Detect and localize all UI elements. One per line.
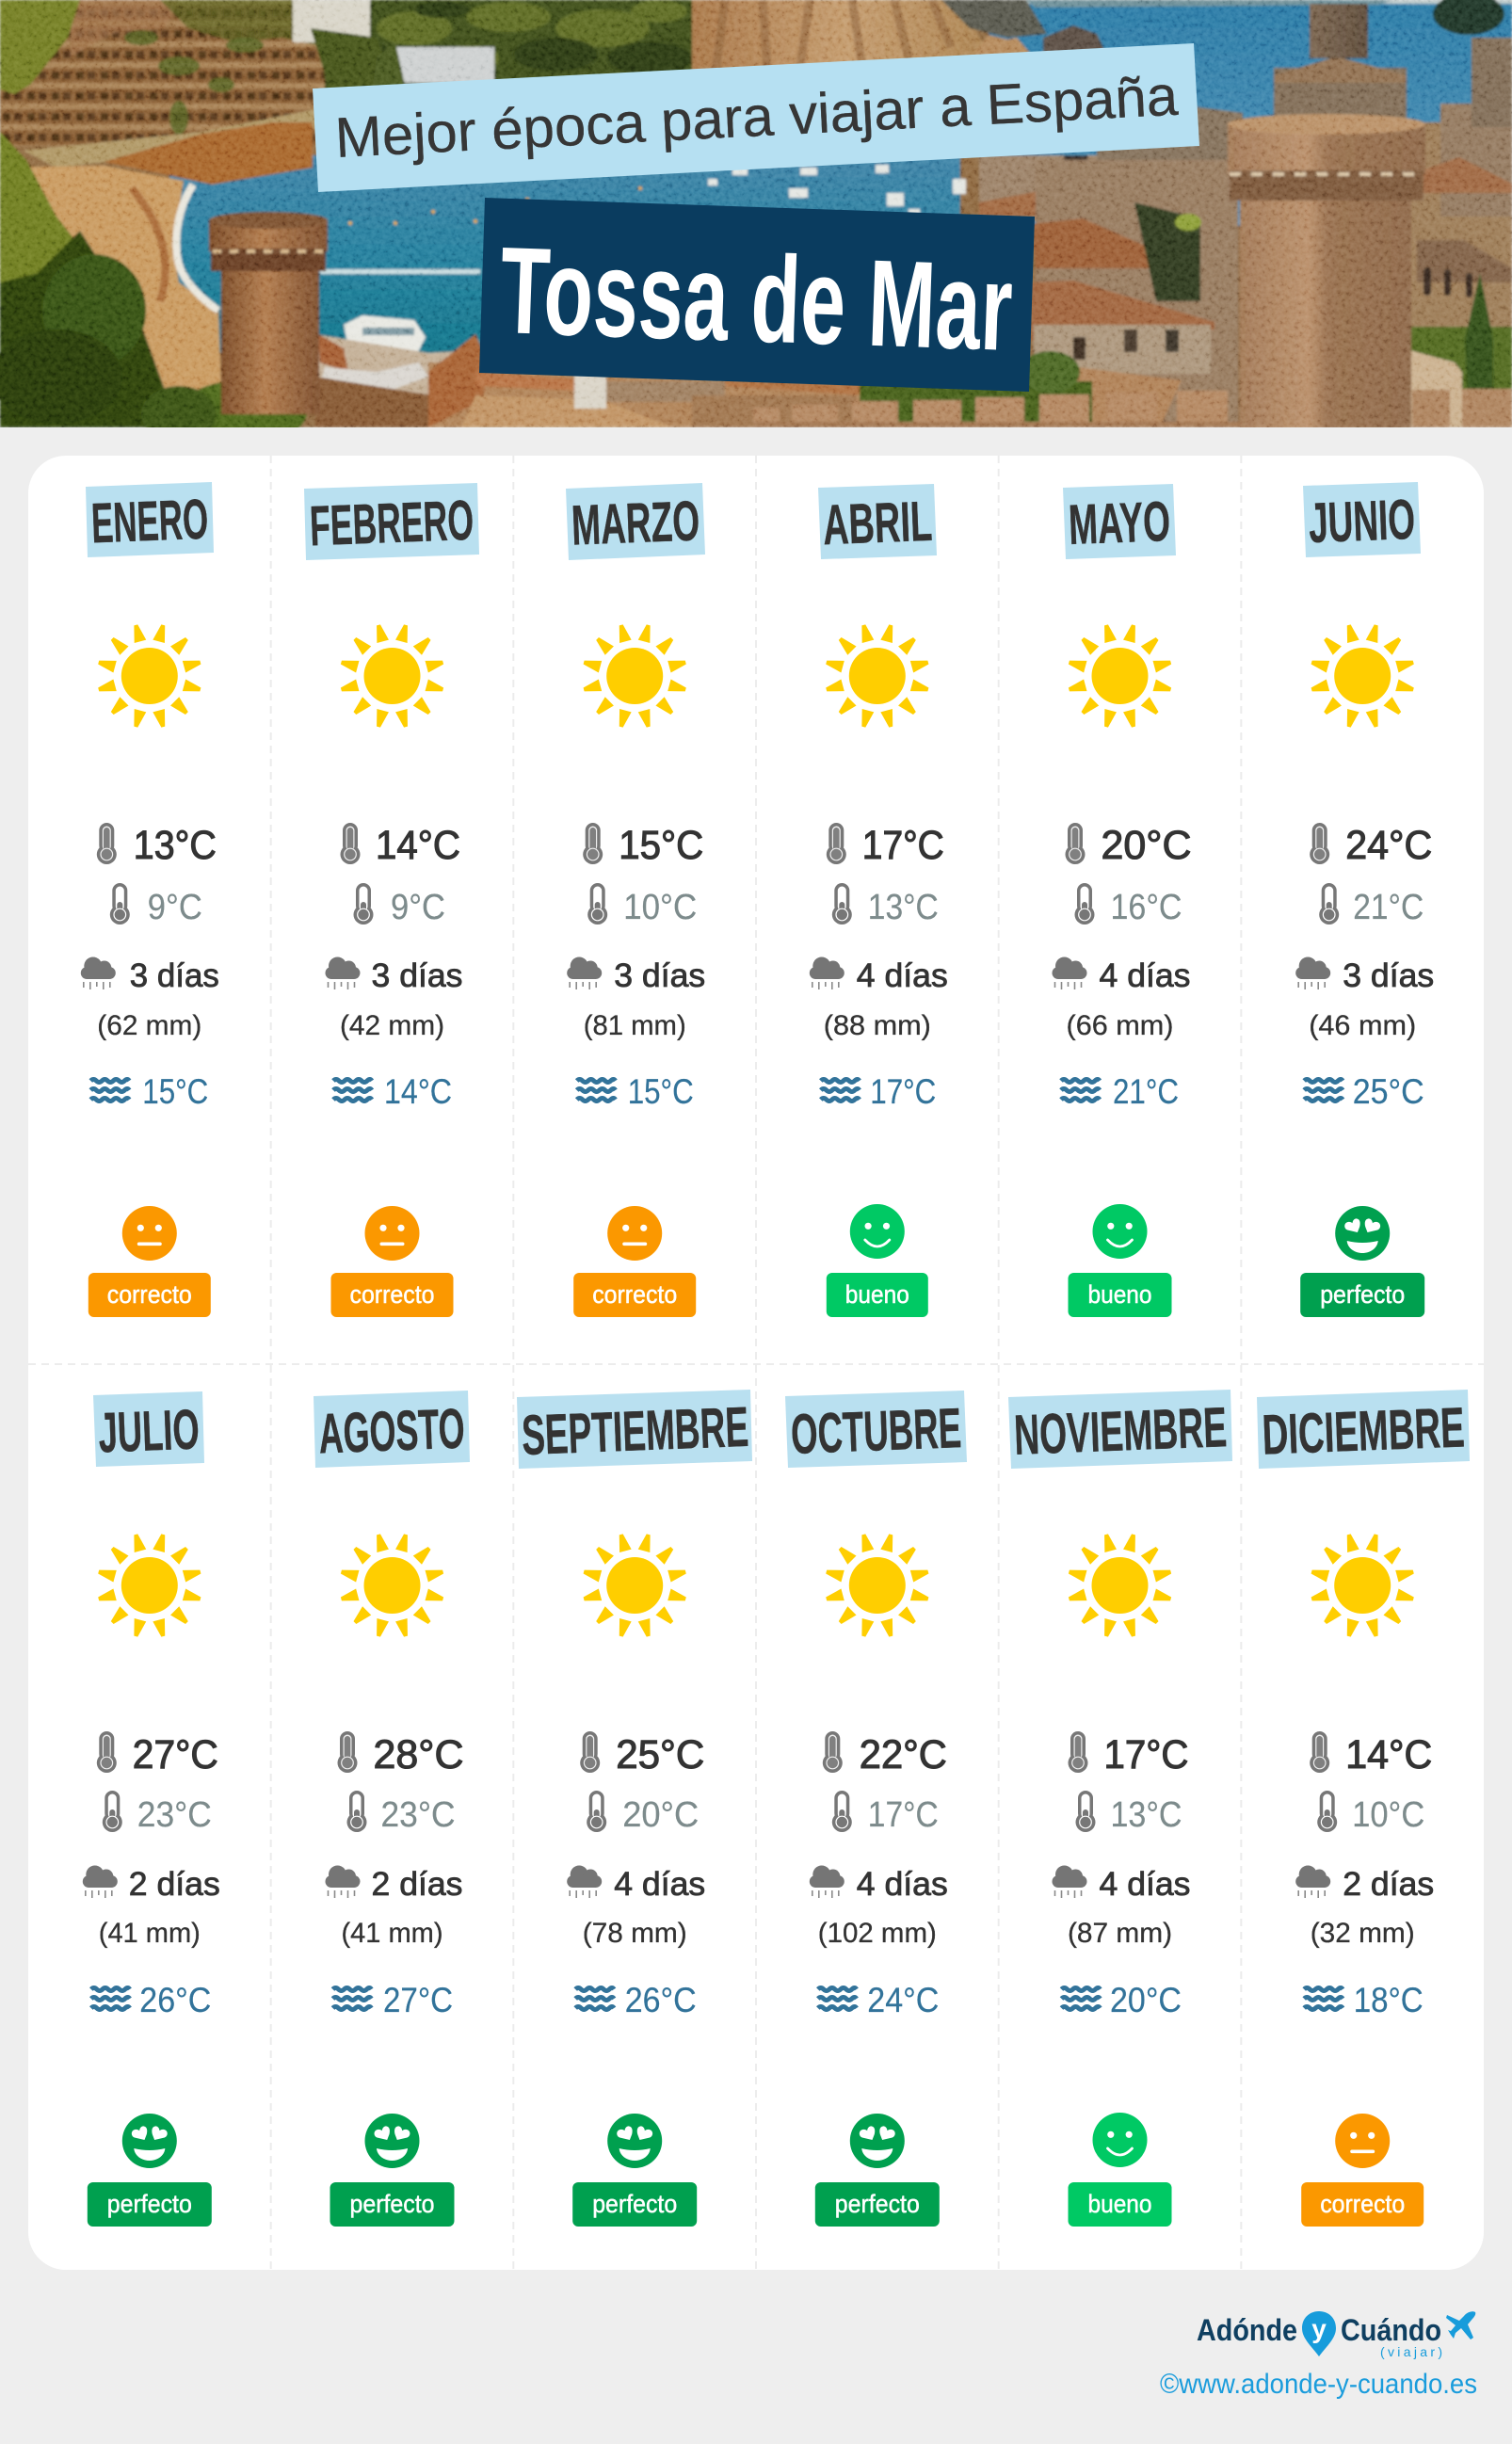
- rainy days: [81, 957, 219, 994]
- rainfall: (32 mm): [1311, 1918, 1415, 1949]
- face: correcto: [607, 1206, 662, 1261]
- month heading: junio: JUNIO: [1308, 488, 1416, 555]
- sea temperature: [333, 1981, 453, 2019]
- max temperature: [1310, 1731, 1432, 1777]
- weather data: junio: [1295, 623, 1434, 1317]
- month heading: septiembre: SEPTIEMBRE: [521, 1395, 749, 1467]
- rainfall: (42 mm): [340, 1010, 444, 1041]
- face: perfecto: [1335, 1206, 1390, 1261]
- month: septiembre: [517, 1390, 752, 2227]
- month heading: enero: [86, 482, 214, 557]
- month heading: octubre: [785, 1391, 967, 1468]
- rating badge: bueno: [1068, 2182, 1171, 2227]
- rainfall: (81 mm): [584, 1010, 686, 1041]
- max temperature: 20°C: [1102, 823, 1192, 868]
- rating badge: bueno: [1068, 1273, 1171, 1317]
- month heading: mayo: [1063, 484, 1176, 559]
- max temperature: [97, 823, 217, 868]
- min temperature: [832, 1791, 939, 1835]
- month: marzo: [566, 483, 705, 1317]
- month heading: agosto: AGOSTO: [317, 1397, 466, 1465]
- min temperature: 13°C: [1111, 1795, 1182, 1835]
- icon: sun: [1068, 1533, 1172, 1638]
- face: perfecto: [365, 2114, 420, 2168]
- sea temperature: [91, 1981, 211, 2019]
- rating badge: correcto: correcto: [1320, 2190, 1405, 2218]
- min temperature: 9°C: [148, 888, 202, 927]
- sea temperature: 25°C: [1353, 1072, 1424, 1111]
- month: julio: [83, 1391, 220, 2227]
- min temperature: 17°C: [868, 1795, 939, 1835]
- rainy days: [83, 1866, 220, 1903]
- rainfall: (88 mm): [824, 1010, 931, 1041]
- rainfall: (87 mm): [1068, 1918, 1172, 1949]
- icon: sun: [582, 623, 687, 729]
- rating badge: perfecto: [1300, 1273, 1424, 1317]
- weather data: febrero: [326, 623, 463, 1317]
- max temperature: [583, 823, 703, 868]
- month heading: septiembre: [517, 1390, 752, 1469]
- face: correcto: [1335, 2114, 1390, 2168]
- icon: sun: [1310, 623, 1415, 729]
- month: mayo: [1053, 484, 1192, 1317]
- icon: sun: [340, 1533, 444, 1638]
- month: abril: [810, 484, 948, 1317]
- min temperature: [1319, 883, 1424, 927]
- min temperature: [346, 1791, 456, 1835]
- month heading: octubre: OCTUBRE: [790, 1396, 962, 1466]
- min temperature: 9°C: [391, 888, 445, 927]
- month heading: mayo: MAYO: [1068, 490, 1171, 556]
- subtitle banner: [313, 43, 1199, 192]
- sea temperature: 21°C: [1113, 1072, 1179, 1111]
- max temperature: [341, 823, 460, 868]
- rainy days: [326, 957, 463, 994]
- rating badge: bueno: bueno: [1088, 2190, 1152, 2218]
- rainy days: [567, 1866, 705, 1903]
- face: bueno: [1092, 1204, 1147, 1259]
- face: perfecto: [607, 2114, 662, 2168]
- weather data: julio: [83, 1533, 220, 2227]
- rating badge: correcto: [573, 1273, 696, 1317]
- face: bueno: [1092, 2113, 1147, 2167]
- month heading: febrero: FEBRERO: [309, 489, 475, 557]
- month heading: febrero: [304, 483, 479, 560]
- max temperature: [97, 1731, 218, 1777]
- month heading: marzo: [566, 483, 705, 560]
- weather data: abril: [810, 623, 948, 1317]
- sea temperature: 15°C: [628, 1072, 694, 1111]
- sea temperature: 14°C: [384, 1072, 452, 1111]
- min temperature: [587, 1791, 699, 1835]
- rainy days: 2 días: [1343, 1866, 1434, 1903]
- rating badge: correcto: correcto: [350, 1280, 435, 1309]
- rainy days: [567, 957, 705, 994]
- month: octubre: [785, 1391, 967, 2227]
- month heading: marzo: MARZO: [571, 489, 700, 557]
- min temperature: 10°C: [1352, 1795, 1424, 1835]
- face: perfecto: [122, 2114, 177, 2168]
- rating badge: correcto: correcto: [107, 1280, 192, 1309]
- icon: sun: [582, 1533, 687, 1638]
- max temperature: 27°C: [133, 1732, 218, 1777]
- hero photo: Tossa de Mar bay, towers and old town: [0, 0, 1512, 444]
- min temperature: 10°C: [623, 888, 697, 927]
- sea temperature: 18°C: [1354, 1981, 1424, 2019]
- subtitle text: Mejor época para viajar a España: [333, 64, 1180, 169]
- weather data: octubre: [810, 1533, 948, 2227]
- month: junio: [1295, 482, 1434, 1317]
- rainfall: (66 mm): [1066, 1010, 1173, 1041]
- face: bueno: [850, 1204, 905, 1259]
- sea temperature: 27°C: [383, 1981, 453, 2019]
- weather data: septiembre: [567, 1533, 705, 2227]
- rating badge: perfecto: perfecto: [592, 2190, 677, 2218]
- rating badge: correcto: [1301, 2182, 1424, 2227]
- min temperature: 23°C: [137, 1795, 212, 1835]
- rating badge: perfecto: perfecto: [1320, 1280, 1405, 1309]
- max temperature: [1068, 1731, 1188, 1777]
- rating badge: perfecto: perfecto: [350, 2190, 435, 2218]
- max temperature: 24°C: [1345, 823, 1432, 868]
- rainfall: (78 mm): [583, 1918, 687, 1949]
- max temperature: 14°C: [376, 823, 460, 868]
- rainfall: (62 mm): [97, 1010, 201, 1041]
- face: perfecto: [850, 2114, 905, 2168]
- rainfall: (102 mm): [818, 1918, 937, 1949]
- title text: Tossa de Mar: [498, 220, 1015, 377]
- month heading: enero: ENERO: [90, 488, 209, 555]
- rainfall: (41 mm): [341, 1918, 442, 1949]
- month: noviembre: [1008, 1390, 1232, 2227]
- max temperature: 14°C: [1345, 1732, 1432, 1777]
- rating badge: bueno: bueno: [1088, 1280, 1152, 1309]
- rainy days: [1053, 957, 1190, 994]
- sea temperature: [333, 1072, 452, 1111]
- min temperature: 16°C: [1111, 888, 1182, 927]
- month heading: agosto: [314, 1391, 470, 1468]
- month heading: abril: [818, 484, 937, 559]
- month heading: noviembre: NOVIEMBRE: [1013, 1395, 1228, 1467]
- rainy days: 4 días: [1100, 1866, 1190, 1903]
- weather data: marzo: [567, 623, 705, 1317]
- rainy days: 4 días: [1100, 957, 1190, 994]
- max temperature: 15°C: [619, 823, 703, 868]
- rainy days: 3 días: [1343, 957, 1434, 994]
- max temperature: 28°C: [373, 1732, 463, 1777]
- rainy days: 2 días: [371, 1866, 463, 1903]
- rating badge: bueno: bueno: [845, 1280, 909, 1309]
- website url: ©www.adonde-y-cuando.es: [1160, 2369, 1477, 2400]
- sea temperature: 17°C: [870, 1072, 936, 1111]
- icon: sun: [825, 623, 930, 729]
- min temperature: 23°C: [380, 1795, 456, 1835]
- min temperature: 21°C: [1353, 888, 1424, 927]
- rainy days: [326, 1866, 463, 1903]
- sea temperature: 24°C: [867, 1981, 939, 2019]
- min temperature: [1075, 883, 1182, 927]
- icon: map pin with y: [1302, 2311, 1336, 2356]
- rainy days: 4 días: [857, 957, 948, 994]
- rating badge: perfecto: perfecto: [835, 2190, 920, 2218]
- icon: map pin with y: y: [1311, 2314, 1327, 2343]
- rating badge: correcto: [88, 1273, 211, 1317]
- icon: sun: [825, 1533, 930, 1638]
- min temperature: [587, 883, 697, 927]
- rating badge: perfecto: perfecto: [107, 2190, 192, 2218]
- max temperature: 25°C: [616, 1732, 704, 1777]
- min temperature: [103, 1791, 212, 1835]
- weather data: agosto: [326, 1533, 463, 2227]
- logo: Adónde y Cuándo: [1197, 2311, 1475, 2359]
- rating badge: perfecto: [88, 2182, 212, 2227]
- sea temperature: 26°C: [139, 1981, 211, 2019]
- sea temperature: [821, 1072, 936, 1111]
- logo: Adónde y Cuándo: (viajar): [1380, 2344, 1442, 2359]
- icon: sun: [1310, 1533, 1415, 1638]
- rainy days: [810, 957, 948, 994]
- sea temperature: [818, 1981, 939, 2019]
- min temperature: [1317, 1791, 1424, 1835]
- rainy days: [1295, 1866, 1434, 1903]
- max temperature: 17°C: [1103, 1732, 1188, 1777]
- icon: sun: [97, 623, 202, 729]
- rating badge: correcto: [331, 1273, 454, 1317]
- min temperature: [832, 883, 939, 927]
- rainy days: 3 días: [371, 957, 463, 994]
- weather data: diciembre: [1295, 1533, 1434, 2227]
- rating badge: correcto: correcto: [592, 1280, 677, 1309]
- icon: sun: [340, 623, 444, 729]
- month: febrero: [304, 483, 479, 1317]
- weather data: noviembre: [1053, 1533, 1190, 2227]
- sea temperature: [1061, 1072, 1179, 1111]
- month heading: abril: ABRIL: [822, 490, 933, 556]
- month: enero: [81, 482, 219, 1317]
- rating badge: perfecto: [572, 2182, 697, 2227]
- month: agosto: [314, 1391, 470, 2227]
- max temperature: [827, 823, 944, 868]
- rainfall: (41 mm): [99, 1918, 201, 1949]
- face: correcto: [365, 1206, 420, 1261]
- max temperature: [823, 1731, 947, 1777]
- panel: monthly climate table: [28, 456, 1484, 2270]
- sea temperature: [575, 1981, 697, 2019]
- min temperature: [1075, 1791, 1182, 1835]
- weather data: enero: [81, 623, 219, 1317]
- month heading: junio: [1303, 482, 1421, 557]
- month heading: julio: JULIO: [97, 1397, 201, 1465]
- min temperature: [110, 883, 202, 927]
- sea temperature: [1062, 1981, 1182, 2019]
- month heading: noviembre: [1008, 1390, 1232, 1469]
- sea temperature: [1304, 1981, 1424, 2019]
- rainy days: 4 días: [614, 1866, 705, 1903]
- min temperature: 20°C: [622, 1795, 699, 1835]
- max temperature: [1310, 823, 1432, 868]
- sea temperature: [1304, 1072, 1424, 1111]
- icon: airplane: [1446, 2311, 1475, 2339]
- rainy days: 3 días: [614, 957, 705, 994]
- weather data: mayo: [1053, 623, 1192, 1317]
- rating badge: perfecto: [815, 2182, 940, 2227]
- logo: Adónde y Cuándo: Adónde: [1197, 2313, 1297, 2347]
- rainy days: 3 días: [130, 957, 219, 994]
- rainy days: [810, 1866, 948, 1903]
- sea temperature: 26°C: [625, 1981, 697, 2019]
- title banner: [479, 198, 1035, 392]
- rainy days: 2 días: [129, 1866, 220, 1903]
- rainy days: [1053, 1866, 1190, 1903]
- max temperature: 17°C: [862, 823, 944, 868]
- face: correcto: [122, 1206, 177, 1261]
- max temperature: 22°C: [860, 1732, 947, 1777]
- sea temperature: [577, 1072, 694, 1111]
- month heading: julio: [93, 1391, 204, 1467]
- rainy days: 4 días: [857, 1866, 948, 1903]
- sea temperature: [90, 1072, 208, 1111]
- rating badge: bueno: [827, 1273, 928, 1317]
- sea temperature: 20°C: [1110, 1981, 1182, 2019]
- sea temperature: 15°C: [142, 1072, 208, 1111]
- rainy days: [1295, 957, 1434, 994]
- icon: sun: [1068, 623, 1172, 729]
- max temperature: 13°C: [134, 823, 217, 868]
- icon: sun: [97, 1533, 202, 1638]
- min temperature: [354, 883, 445, 927]
- rating badge: perfecto: [330, 2182, 454, 2227]
- logo: Adónde y Cuándo: Cuándo: [1341, 2313, 1441, 2347]
- rainfall: (46 mm): [1309, 1010, 1416, 1041]
- month: diciembre: [1257, 1390, 1470, 2227]
- min temperature: 13°C: [868, 888, 939, 927]
- max temperature: [580, 1731, 704, 1777]
